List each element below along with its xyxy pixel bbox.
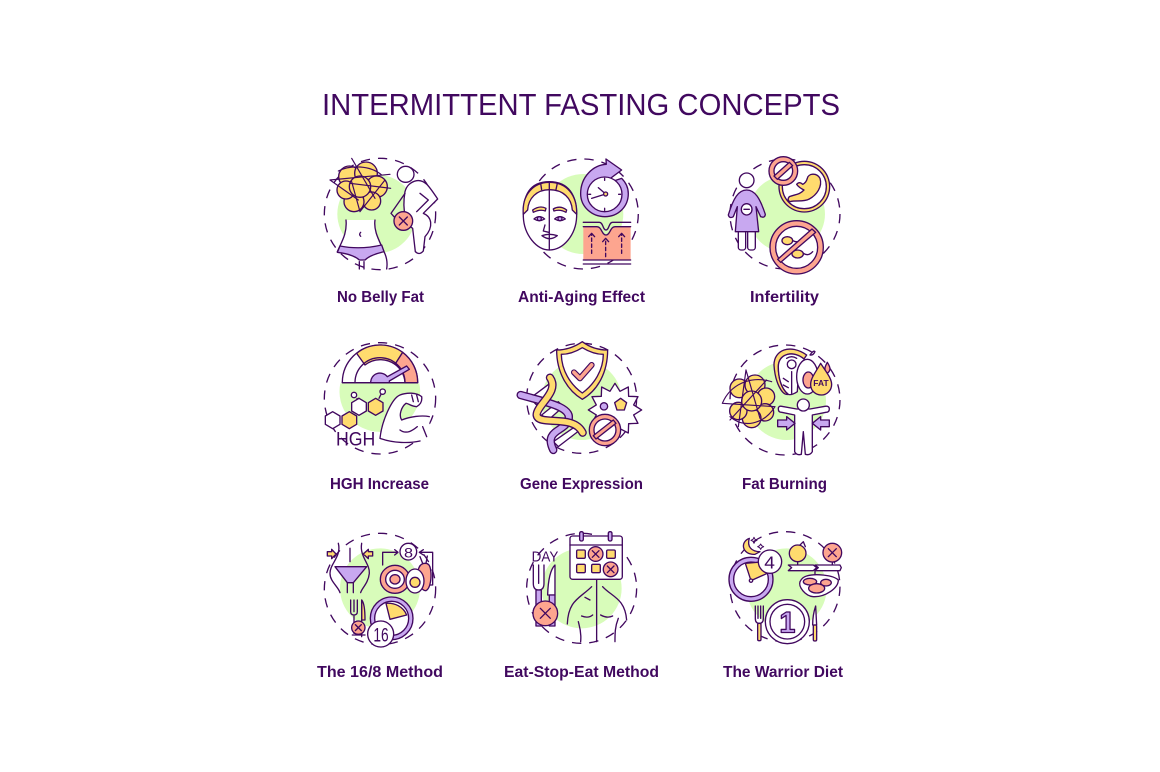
panel: The Warrior Diet	[723, 532, 844, 681]
label: The Warrior Diet: The Warrior Diet	[723, 664, 844, 681]
panel: Fat Burning	[722, 345, 840, 493]
label: The 16/8 Method: The 16/8 Method	[317, 664, 443, 681]
icon: 16/8 method: 16	[373, 625, 389, 646]
icon: eat-stop-eat method: DAY	[532, 550, 559, 566]
panel: The 16/8 Method	[317, 533, 443, 681]
label: HGH Increase: HGH Increase	[330, 476, 429, 493]
icon: fat burning	[722, 345, 840, 455]
panel: Anti-Aging Effect	[518, 159, 646, 306]
label: Fat Burning: Fat Burning	[742, 476, 827, 493]
icon: 16/8 method	[324, 533, 436, 647]
icon: anti-aging effect	[523, 159, 638, 269]
panel: Eat-Stop-Eat Method	[504, 532, 659, 681]
label: Eat-Stop-Eat Method: Eat-Stop-Eat Method	[504, 664, 659, 681]
title: INTERMITTENT FASTING CONCEPTS	[322, 87, 840, 122]
icon: warrior diet: 4	[764, 553, 775, 573]
icon: warrior diet: 1	[779, 607, 795, 640]
icon: gene expression	[521, 342, 642, 453]
icon: eat-stop-eat method	[527, 532, 637, 643]
panel: HGH Increase	[324, 343, 436, 493]
label: Infertility: Infertility	[750, 289, 819, 306]
panel: Infertility	[728, 157, 840, 306]
icon: no belly fat	[324, 158, 438, 270]
icon: infertility	[728, 157, 840, 274]
icon: 16/8 method: 8	[404, 545, 413, 561]
icon: HGH increase	[324, 343, 436, 454]
icon: HGH increase: HGH	[336, 430, 375, 451]
label: No Belly Fat: No Belly Fat	[337, 289, 425, 306]
label: Anti-Aging Effect: Anti-Aging Effect	[518, 289, 646, 306]
label: Gene Expression: Gene Expression	[520, 476, 643, 493]
icon: fat burning: FAT	[813, 379, 829, 388]
panel: No Belly Fat	[324, 158, 438, 306]
panel: Gene Expression	[520, 342, 643, 493]
icon: warrior diet	[729, 532, 842, 644]
